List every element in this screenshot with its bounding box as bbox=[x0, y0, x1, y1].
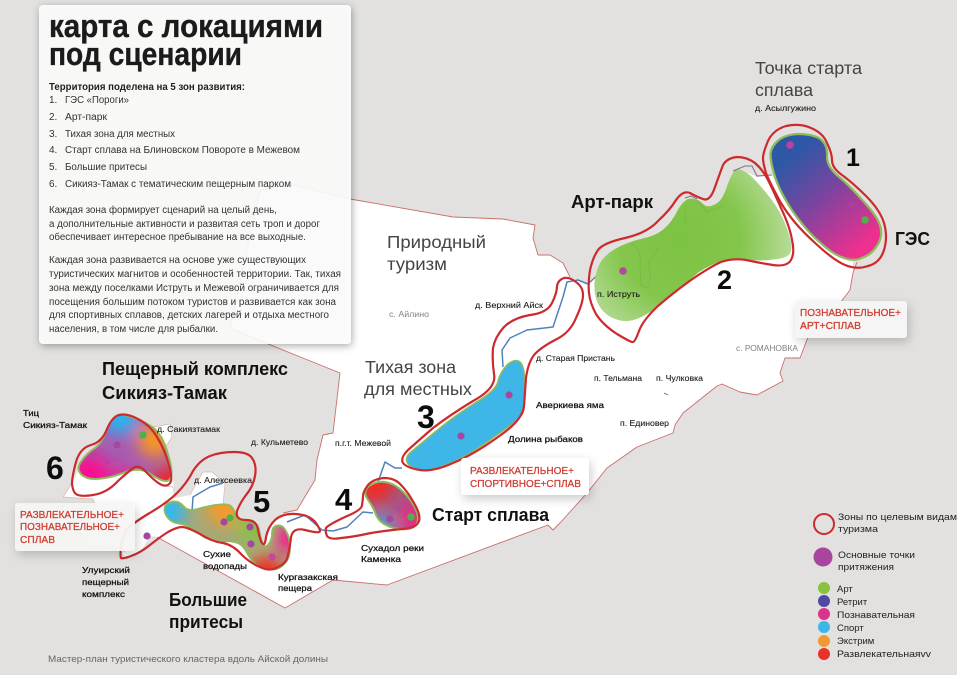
legend: Познавательная bbox=[837, 610, 915, 621]
legend: Ретрит bbox=[837, 597, 868, 608]
zone 2: art park blob bbox=[596, 166, 790, 320]
large headings: ГЭС bbox=[895, 229, 930, 249]
legend: Спорт bbox=[837, 623, 864, 634]
list of zones: 4. bbox=[49, 145, 57, 156]
attraction points bbox=[90, 141, 869, 561]
large headings: сплава bbox=[755, 80, 813, 100]
legend: Экстрим bbox=[837, 636, 874, 647]
panel: description bbox=[39, 5, 351, 344]
list of zones: 6. bbox=[49, 179, 57, 190]
list of zones: 1. bbox=[49, 95, 57, 106]
paragraph: scenarios: обеспечивает интересное пребывание на все выходные. bbox=[49, 231, 306, 243]
large headings: Природный bbox=[387, 232, 486, 252]
place labels: с. РОМАНОВКА bbox=[736, 343, 798, 353]
zone 6: cave park blob bbox=[78, 414, 172, 482]
place labels: д. Алексеевка bbox=[194, 475, 252, 485]
list of zones: Большие притесы bbox=[65, 162, 147, 173]
zone 3: quiet zone blob bbox=[406, 361, 525, 470]
place labels: с. Айлино bbox=[389, 309, 429, 319]
rivers bbox=[192, 244, 632, 531]
large headings: Сикияз-Тамак bbox=[102, 383, 228, 403]
place labels: п. Иструть bbox=[597, 289, 641, 299]
paragraph: development: для спортивных сплавов, детских лагерей и отдыха местного bbox=[49, 310, 329, 321]
list of zones: Территория поделена на 5 зон развития: bbox=[49, 82, 245, 93]
paragraph: development: зона между поселками Иструть и Межевой ограничивается для bbox=[49, 283, 339, 294]
legend bbox=[814, 512, 957, 660]
legend: Основные точки bbox=[838, 550, 915, 561]
place labels: Сухие bbox=[203, 549, 231, 559]
place labels: пещерный bbox=[82, 577, 129, 587]
territory map bbox=[63, 170, 857, 608]
title: под сценарии bbox=[49, 36, 242, 72]
large headings: Точка старта bbox=[755, 58, 862, 78]
place labels bbox=[23, 103, 816, 599]
zone 5: tributaries blob bbox=[164, 500, 291, 571]
large headings: притесы bbox=[169, 612, 243, 632]
list of zones: Старт сплава на Блиновском Повороте в Межевом bbox=[65, 145, 300, 156]
legend: Зоны по целевым видам bbox=[838, 512, 957, 523]
zone contours bbox=[72, 125, 886, 570]
callout: zone 1-2 scenarios: ПОЗНАВАТЕЛЬНОЕ+ bbox=[800, 307, 901, 319]
large headings: Большие bbox=[169, 590, 247, 610]
callout: zone 6 scenarios bbox=[15, 503, 135, 551]
list of zones: 2. bbox=[49, 112, 57, 123]
legend: притяжения bbox=[838, 562, 894, 573]
place labels: Аверкиева яма bbox=[536, 400, 604, 410]
large headings: туризм bbox=[387, 254, 447, 274]
list of zones: Тихая зона для местных bbox=[65, 129, 175, 140]
place labels: Долина рыбаков bbox=[508, 434, 584, 444]
large headings: Старт сплава bbox=[432, 505, 550, 525]
paragraph: scenarios: Каждая зона формирует сценарий на целый день, bbox=[49, 204, 277, 216]
place labels: д. Кульметево bbox=[251, 437, 308, 447]
title bbox=[49, 8, 323, 72]
zone 4: rafting start blob bbox=[364, 480, 418, 530]
footer caption: Мастер-план туристического кластера вдоль Айской долины bbox=[48, 654, 328, 665]
legend: Арт bbox=[837, 584, 853, 595]
place labels: п. Тельмана bbox=[594, 373, 642, 383]
place labels: Сухадол реки bbox=[361, 543, 424, 553]
callout: zone 3 scenarios: СПОРТИВНОЕ+СПЛАВ bbox=[470, 478, 581, 490]
paragraph: development: туристических магнитов и особенностей территории. Так, тихая bbox=[49, 268, 341, 280]
place labels: п.г.т. Межевой bbox=[335, 438, 391, 448]
legend: туризма bbox=[838, 524, 879, 535]
place labels: Каменка bbox=[361, 554, 401, 564]
paragraph: development: посещения большим потоком туристов и развивается как зона bbox=[49, 296, 336, 308]
zone numbers: 5 bbox=[253, 484, 270, 519]
list of zones: 3. bbox=[49, 129, 57, 140]
large headings: для местных bbox=[364, 379, 472, 399]
place labels: Тиц bbox=[23, 408, 39, 418]
callout: zone 6 scenarios: СПЛАВ bbox=[20, 534, 55, 546]
zone numbers: 1 bbox=[846, 144, 860, 172]
large headings: Пещерный комплекс bbox=[102, 359, 288, 379]
place labels: пещера bbox=[278, 583, 312, 593]
callout: zone 6 scenarios: РАЗВЛЕКАТЕЛЬНОЕ+ bbox=[20, 509, 124, 521]
place labels: д. Сакиязтамак bbox=[157, 424, 220, 434]
callout: zone 1-2 scenarios bbox=[795, 301, 907, 338]
list of zones: 5. bbox=[49, 162, 57, 173]
place labels: п. Чулковка bbox=[656, 373, 703, 383]
place labels: Улуирский bbox=[82, 565, 130, 575]
paragraph: development bbox=[49, 255, 341, 335]
zone numbers: 3 bbox=[417, 399, 435, 435]
paragraph: development: Каждая зона развивается на основе уже существующих bbox=[49, 255, 306, 266]
zone numbers: 4 bbox=[335, 482, 353, 517]
paragraph: development: населения, в том числе для рыбалки. bbox=[49, 323, 218, 335]
zone numbers bbox=[46, 144, 860, 519]
large headings: Тихая зона bbox=[365, 357, 456, 377]
large headings: Арт-парк bbox=[571, 192, 654, 212]
callout: zone 3 scenarios bbox=[461, 458, 589, 495]
place labels: Сикияз-Тамак bbox=[23, 420, 87, 430]
list of zones bbox=[49, 82, 300, 190]
large headings bbox=[102, 58, 930, 632]
place labels: д. Старая Пристань bbox=[536, 353, 616, 363]
place labels: д. Асылгужино bbox=[755, 103, 816, 113]
paragraph: scenarios bbox=[49, 204, 320, 243]
list of zones: Сикияз-Тамак с тематическим пещерным парком bbox=[65, 179, 291, 190]
legend: Развлекательнаяvv bbox=[837, 649, 931, 660]
zone numbers: 6 bbox=[46, 450, 64, 486]
place labels: комплекс bbox=[82, 589, 126, 599]
title: карта с локациями bbox=[49, 8, 323, 44]
place labels: Кургазакская bbox=[278, 572, 338, 582]
callout: zone 6 scenarios: ПОЗНАВАТЕЛЬНОЕ+ bbox=[20, 521, 120, 533]
place labels: водопады bbox=[203, 561, 247, 571]
list of zones: Арт-парк bbox=[65, 112, 108, 123]
paragraph: scenarios: а дополнительные активности и развитая сеть троп и дорог bbox=[49, 219, 320, 230]
callout: zone 3 scenarios: РАЗВЛЕКАТЕЛЬНОЕ+ bbox=[470, 465, 574, 477]
zone 1: GES blob bbox=[770, 134, 881, 260]
callout: zone 1-2 scenarios: АРТ+СПЛАВ bbox=[800, 320, 861, 332]
list of zones: ГЭС «Пороги» bbox=[65, 95, 129, 106]
zone numbers: 2 bbox=[717, 265, 732, 295]
place labels: д. Верхний Айск bbox=[475, 300, 543, 310]
place labels: п. Единовер bbox=[620, 418, 669, 428]
